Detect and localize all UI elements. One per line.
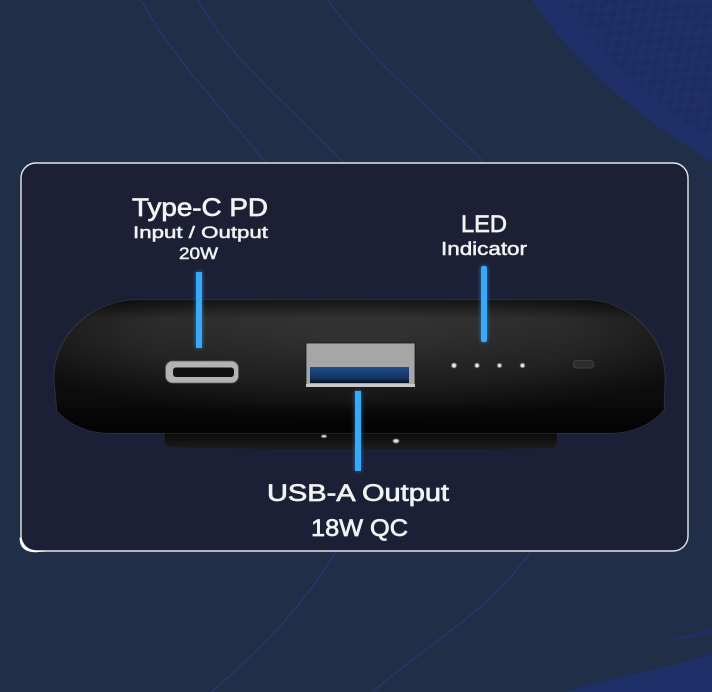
pointer: type-c: [196, 272, 202, 348]
background: bottom right swoosh: [565, 628, 712, 692]
pointer: led: [481, 266, 487, 342]
type-c port: [166, 361, 238, 383]
power bank: [54, 300, 665, 449]
usb-a port: [306, 343, 415, 387]
label: usb-a: 18W QC: [311, 515, 408, 542]
label: usb-a: [267, 480, 449, 542]
label: led: LED: [461, 211, 507, 238]
panel background: [21, 163, 688, 551]
panel: [20, 163, 688, 552]
background: top right textured swoosh: [532, 0, 712, 162]
label: led: Indicator: [441, 239, 527, 259]
background: curved lines bottom: [212, 551, 531, 692]
base dots: [322, 435, 399, 443]
label: usb-a: USB-A Output: [267, 480, 449, 507]
label: type-c: Input / Output: [133, 223, 268, 242]
led dots: [452, 363, 525, 368]
device body: [54, 300, 665, 433]
label: type-c: 20W: [179, 244, 218, 263]
label: type-c: [132, 194, 268, 263]
pointer: usb-a: [355, 391, 361, 471]
label: led: [441, 211, 527, 259]
power button: [574, 360, 594, 368]
base plate: [165, 430, 557, 449]
body shading: [54, 300, 665, 433]
background: curved lines top: [141, 0, 484, 163]
label: type-c: Type-C PD: [132, 194, 268, 222]
panel corner highlight: [20, 538, 46, 552]
